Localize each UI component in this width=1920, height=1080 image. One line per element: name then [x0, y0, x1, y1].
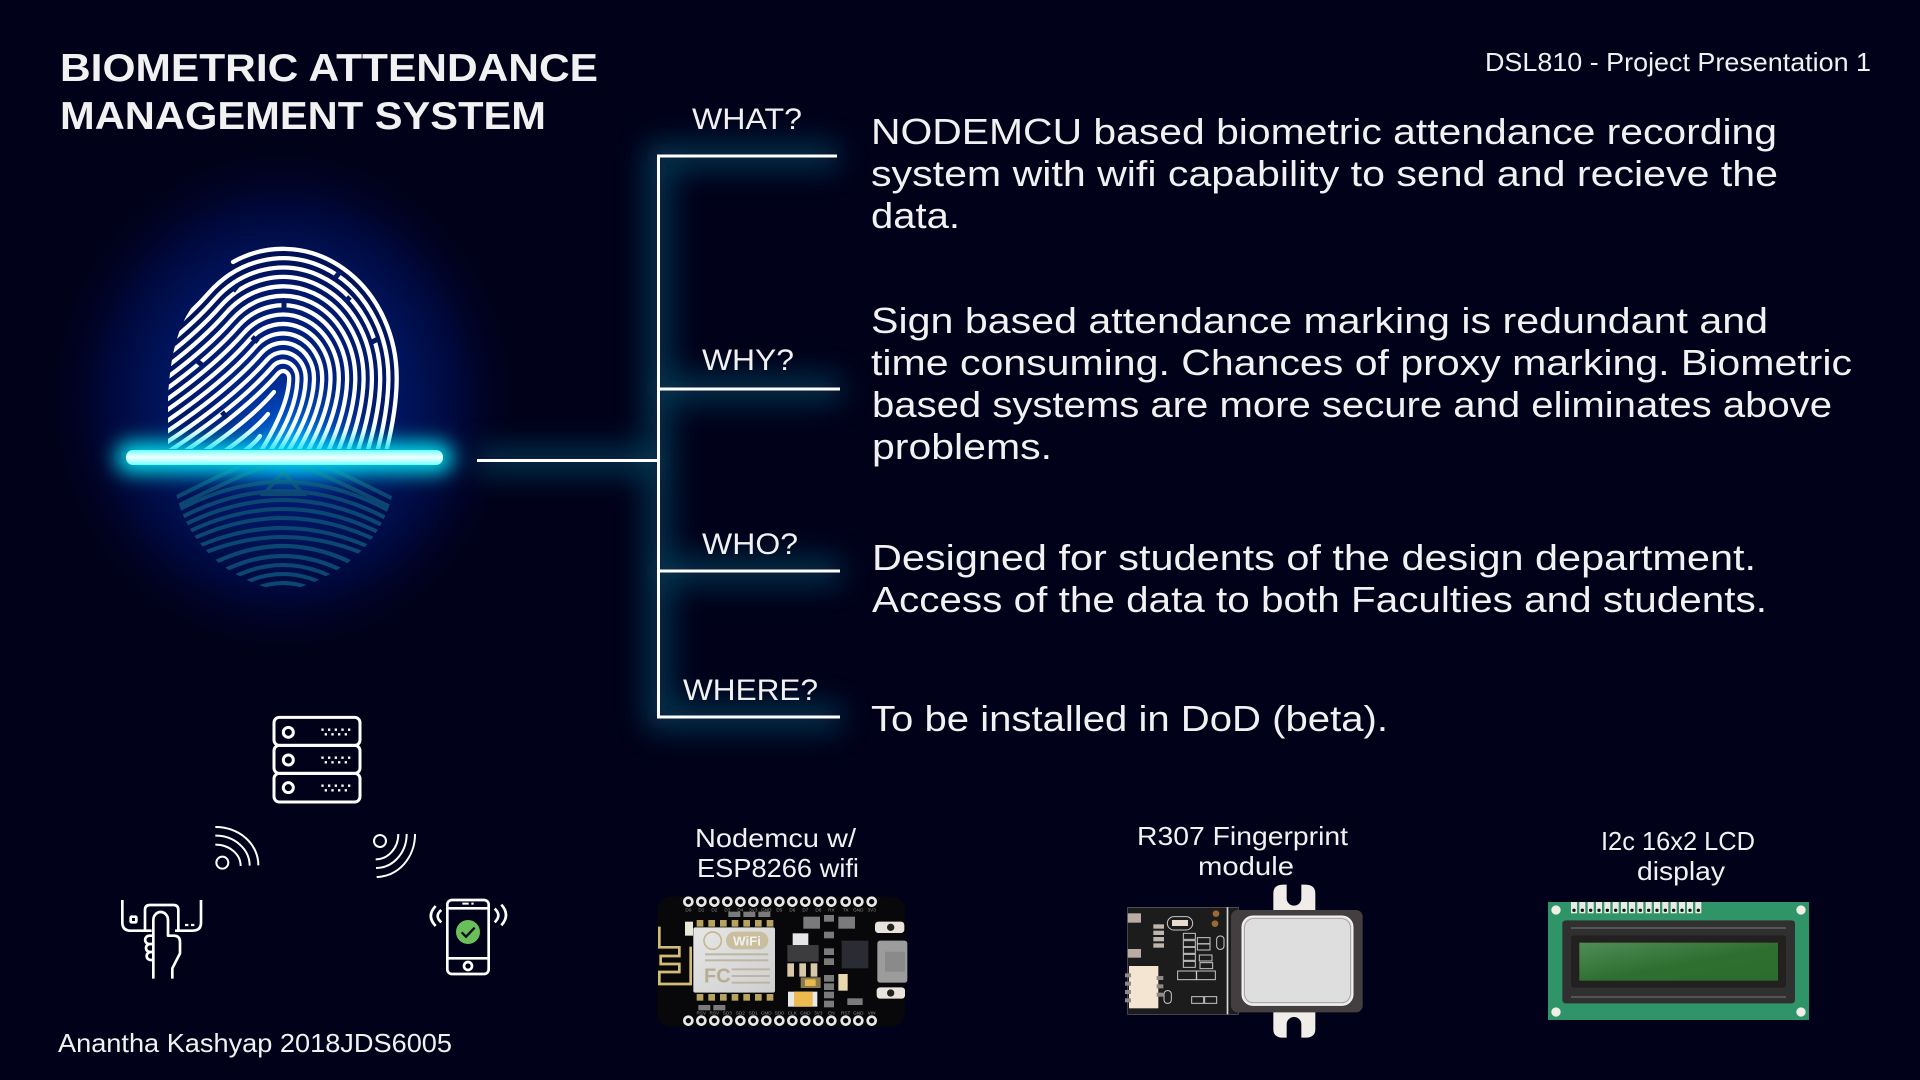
caption: nodemcu: [695, 823, 859, 883]
pin labels: SD1: [749, 1011, 758, 1016]
caption: nodemcu: ESP8266 wifi: [697, 853, 859, 883]
icon: wifi signal right: [374, 834, 415, 877]
pin labels: D8: [815, 907, 822, 912]
fingerprint scanner illustration: [74, 174, 491, 626]
author credit: Anantha Kashyap 2018JDS6005: [58, 1028, 452, 1058]
pin labels: RSV: [710, 1011, 720, 1016]
pin labels: RST: [841, 1011, 850, 1016]
pin labels: GND: [853, 907, 864, 912]
pin labels: D1: [698, 907, 705, 912]
label: where: WHERE?: [683, 674, 818, 707]
caption: lcd display: I2c 16x2 LCD: [1601, 826, 1755, 856]
pin labels: D4: [737, 907, 744, 912]
label: what: WHAT?: [692, 103, 802, 136]
frame: [1562, 920, 1795, 1003]
icon: wifi signal left: [215, 827, 258, 869]
pin labels: RX: [828, 907, 835, 912]
icon: finger on reader: [122, 900, 201, 979]
text block: why: problems.: [872, 426, 1052, 467]
esp module: [693, 927, 775, 993]
text block: what: data.: [871, 195, 960, 236]
pin labels: SD3: [723, 1011, 732, 1016]
connector tree: [477, 156, 840, 717]
pin labels: 3V3: [868, 907, 876, 912]
header pins: [1571, 902, 1701, 913]
image: nodemcu board: FC: [704, 966, 731, 988]
text block: why: based systems are more secure and eliminates above: [872, 384, 1832, 425]
regulator and capacitors: [793, 933, 808, 945]
pcb: [1128, 907, 1238, 1014]
pin labels: D0: [685, 907, 692, 912]
label: why: WHY?: [702, 344, 794, 377]
pin labels: 3V3: [749, 907, 758, 912]
text block: who: Access of the data to both Faculties and students.: [872, 579, 1767, 620]
caption: lcd display: display: [1637, 856, 1725, 886]
pin labels: TX: [843, 907, 850, 912]
lcd screen: [1579, 943, 1778, 981]
antenna trace: [659, 927, 691, 984]
text block: why: time consuming. Chances of proxy marking. Biometric: [871, 342, 1852, 383]
caption: fingerprint module: [1137, 821, 1349, 881]
buttons: [875, 922, 904, 933]
pin labels: GND: [853, 1011, 864, 1016]
pin labels: [685, 907, 876, 1016]
gold pads: [697, 920, 773, 1001]
text block: why: Sign based attendance marking is redundant and: [871, 300, 1768, 341]
title: [60, 47, 598, 138]
pin labels: D7: [802, 907, 809, 912]
icon: server: [274, 717, 360, 802]
image: nodemcu board: [657, 897, 907, 1027]
caption: fingerprint module: module: [1198, 851, 1294, 881]
pin labels: D6: [789, 907, 796, 912]
pin labels: D2: [711, 907, 718, 912]
pin labels: EN: [828, 1011, 835, 1016]
fingerprint reflection: [176, 467, 392, 588]
mounting tabs: [1273, 885, 1315, 1038]
chip: [842, 941, 868, 968]
image: r307 fingerprint module: [1125, 885, 1363, 1038]
pin labels: GND: [800, 1011, 811, 1016]
image: lcd display: [1548, 902, 1809, 1020]
pin headers: [684, 898, 876, 1025]
pin labels: VIN: [868, 1011, 876, 1016]
sensor body: [1231, 910, 1363, 1012]
blue glow: [43, 140, 523, 660]
text block: what: [871, 111, 1778, 236]
connector: [1129, 966, 1158, 1008]
icon: phone confirmation: [431, 900, 506, 974]
text block: what: NODEMCU based biometric attendance recording: [871, 111, 1777, 152]
pin labels: RSV: [697, 1011, 707, 1016]
text block: why: [871, 300, 1852, 467]
scanner bar: [116, 442, 453, 473]
title: MANAGEMENT SYSTEM: [60, 95, 546, 138]
text block: what: system with wifi capability to send and recieve the: [871, 153, 1778, 194]
pin labels: D3: [724, 907, 731, 912]
usb port: [877, 941, 907, 983]
presentation label: DSL810 - Project Presentation 1: [1485, 47, 1871, 77]
pin labels: SD0: [775, 1011, 784, 1016]
pin labels: CLK: [788, 1011, 798, 1016]
caption: fingerprint module: R307 Fingerprint: [1137, 821, 1349, 851]
pcb parts: [1164, 917, 1224, 1003]
pin labels: CMD: [761, 1011, 772, 1016]
pin labels: D5: [776, 907, 783, 912]
pin labels: SD2: [736, 1011, 745, 1016]
text block: who: [872, 537, 1767, 620]
small parts: [698, 912, 863, 1010]
title: BIOMETRIC ATTENDANCE: [60, 47, 598, 90]
label: who: WHO?: [702, 528, 798, 561]
caption: nodemcu: Nodemcu w/: [695, 823, 857, 853]
caption: lcd display: [1601, 826, 1755, 886]
pin labels: 3V3: [814, 1011, 823, 1016]
text block: who: Designed for students of the design department.: [872, 537, 1756, 578]
image: nodemcu board: WiFi: [733, 933, 761, 948]
text block: where: To be installed in DoD (beta).: [871, 698, 1388, 739]
fingerprint ridges: [168, 246, 399, 449]
pin labels: GND: [761, 907, 772, 912]
